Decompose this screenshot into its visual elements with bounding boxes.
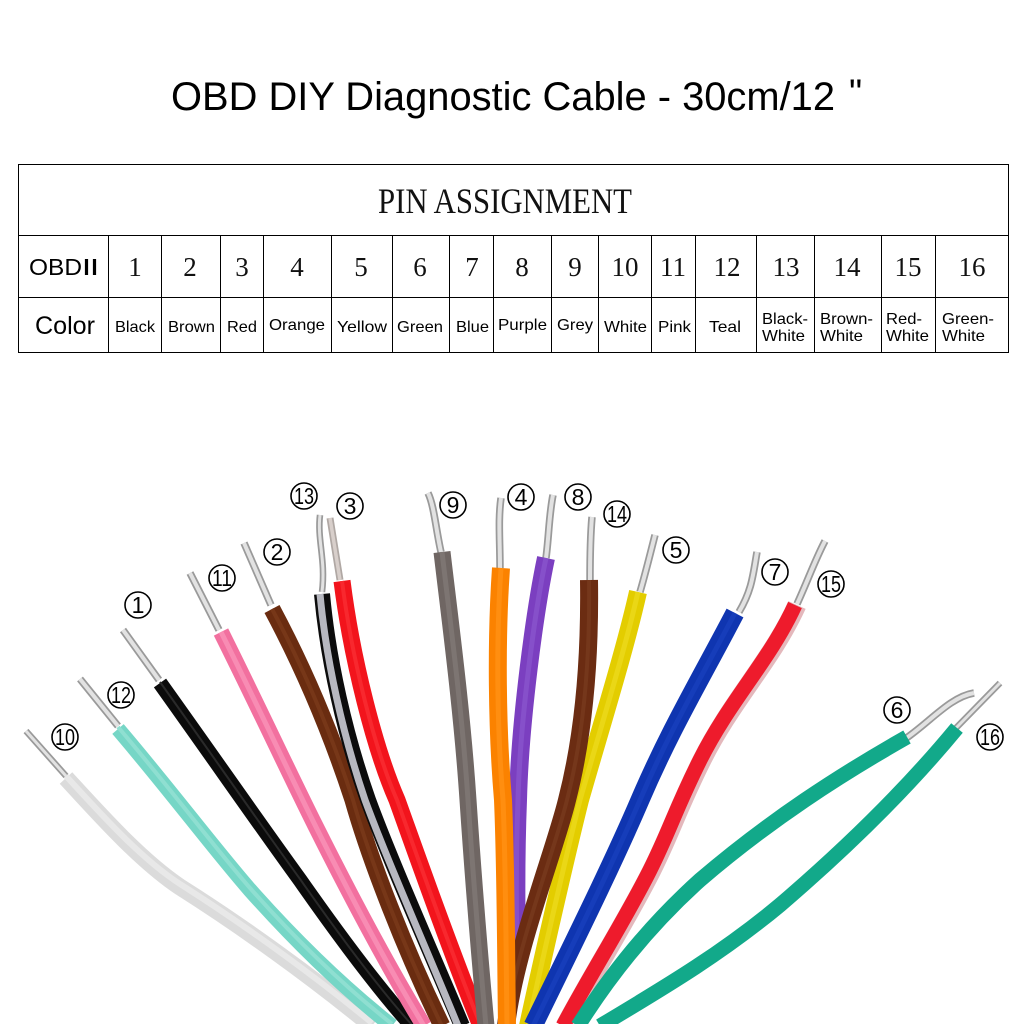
callout 14: 14 bbox=[607, 501, 627, 527]
callout 3 bbox=[337, 493, 363, 519]
callout 1: 1 bbox=[132, 592, 144, 618]
callout 9: 9 bbox=[447, 492, 459, 518]
row: OBDII pin numbers: 7 bbox=[465, 252, 479, 282]
row: OBDII pin numbers: 11 bbox=[660, 252, 686, 282]
row: OBDII pin numbers: 4 bbox=[290, 252, 304, 282]
callout 4 bbox=[508, 484, 534, 510]
row: wire colours: Orange bbox=[269, 317, 325, 334]
wire 1: black bbox=[123, 630, 412, 1024]
row: wire colours: Teal bbox=[709, 319, 741, 336]
row: OBDII pin numbers: 13 bbox=[772, 252, 800, 282]
row: OBDII pin numbers: 16 bbox=[958, 252, 986, 282]
row: OBDII pin numbers: 8 bbox=[515, 252, 529, 282]
table heading: PIN ASSIGNMENT bbox=[378, 181, 632, 221]
wire 6: green bbox=[578, 693, 974, 1024]
callout 13: 13 bbox=[294, 483, 314, 509]
row: wire colours: White bbox=[820, 328, 863, 345]
row: OBDII pin numbers: OBD bbox=[29, 254, 82, 280]
wire 15: red-white bbox=[563, 541, 825, 1024]
callout 11: 11 bbox=[212, 565, 232, 591]
row: OBDII pin numbers: 9 bbox=[568, 252, 582, 282]
row: wire colours bbox=[35, 311, 994, 345]
callout 6: 6 bbox=[891, 697, 903, 723]
row: wire colours: Red bbox=[227, 319, 257, 336]
wire 13: black-white bbox=[319, 515, 462, 1024]
row: wire colours: White bbox=[762, 328, 805, 345]
row: OBDII pin numbers: 3 bbox=[235, 252, 249, 282]
row: wire colours: Green bbox=[397, 319, 443, 336]
row: wire colours: White bbox=[886, 328, 929, 345]
wire 7: blue bbox=[533, 552, 757, 1024]
row: wire colours: White bbox=[604, 319, 647, 336]
row: OBDII pin numbers: 2 bbox=[183, 252, 197, 282]
wire 9: grey bbox=[428, 493, 486, 1024]
wire 16: green-white bbox=[600, 683, 1000, 1024]
callout 1 bbox=[125, 592, 151, 618]
row: OBDII pin numbers: 15 bbox=[894, 252, 922, 282]
title: OBD DIY Diagnostic Cable - 30cm/12 bbox=[171, 75, 835, 119]
row: wire colours: Black- bbox=[762, 311, 808, 328]
wire 11: pink bbox=[190, 573, 424, 1024]
pin number callouts bbox=[52, 483, 1003, 750]
row: wire colours: Pink bbox=[658, 319, 692, 336]
row: wire colours: Brown- bbox=[820, 311, 873, 328]
wire 8: purple bbox=[516, 495, 553, 950]
wire 12: teal bbox=[80, 679, 392, 1024]
row: wire colours: Yellow bbox=[337, 319, 387, 336]
row: wire colours: White bbox=[942, 328, 985, 345]
row: wire colours: Black bbox=[115, 319, 156, 336]
callout 7: 7 bbox=[769, 559, 781, 585]
wire 3: red bbox=[330, 518, 481, 1024]
callout 12: 12 bbox=[111, 682, 131, 708]
row: wire colours: Red- bbox=[886, 311, 922, 328]
callout 6 bbox=[884, 697, 910, 723]
table: pin assignment bbox=[18, 164, 1008, 352]
callout 4: 4 bbox=[515, 484, 528, 510]
callout 8 bbox=[565, 484, 591, 510]
wire 10: white bbox=[26, 731, 372, 1024]
row: wire colours: Color bbox=[35, 312, 95, 340]
row: wire colours: Purple bbox=[498, 317, 547, 334]
wire 2: brown bbox=[244, 543, 442, 1024]
wire 5: yellow bbox=[528, 535, 655, 1024]
callout 5: 5 bbox=[670, 537, 682, 563]
callout 16: 16 bbox=[980, 724, 1000, 750]
row: wire colours: Brown bbox=[168, 319, 215, 336]
row: wire colours: Green- bbox=[942, 311, 994, 328]
row: OBDII pin numbers: 6 bbox=[413, 252, 427, 282]
row: OBDII pin numbers: 5 bbox=[354, 252, 368, 282]
row: wire colours: Blue bbox=[456, 319, 489, 336]
callout 2: 2 bbox=[271, 539, 283, 565]
row: OBDII pin numbers bbox=[29, 252, 986, 282]
callout 10: 10 bbox=[55, 724, 75, 750]
row: wire colours: Grey bbox=[557, 317, 593, 334]
row: OBDII pin numbers: 10 bbox=[612, 252, 638, 282]
wire 14: brown-white bbox=[506, 517, 592, 1024]
callout 2 bbox=[264, 539, 290, 565]
row: OBDII pin numbers: 1 bbox=[128, 252, 142, 282]
row: OBDII pin numbers: 14 bbox=[834, 252, 861, 282]
callout 3: 3 bbox=[344, 493, 356, 519]
row: OBDII pin numbers: 12 bbox=[714, 252, 740, 282]
callout 5 bbox=[663, 537, 689, 563]
callout 15: 15 bbox=[821, 571, 841, 597]
callout 7 bbox=[762, 559, 788, 585]
callout 8: 8 bbox=[572, 484, 584, 510]
callout 9 bbox=[440, 492, 466, 518]
title: " bbox=[849, 72, 862, 113]
wire 4: orange bbox=[498, 498, 507, 1024]
